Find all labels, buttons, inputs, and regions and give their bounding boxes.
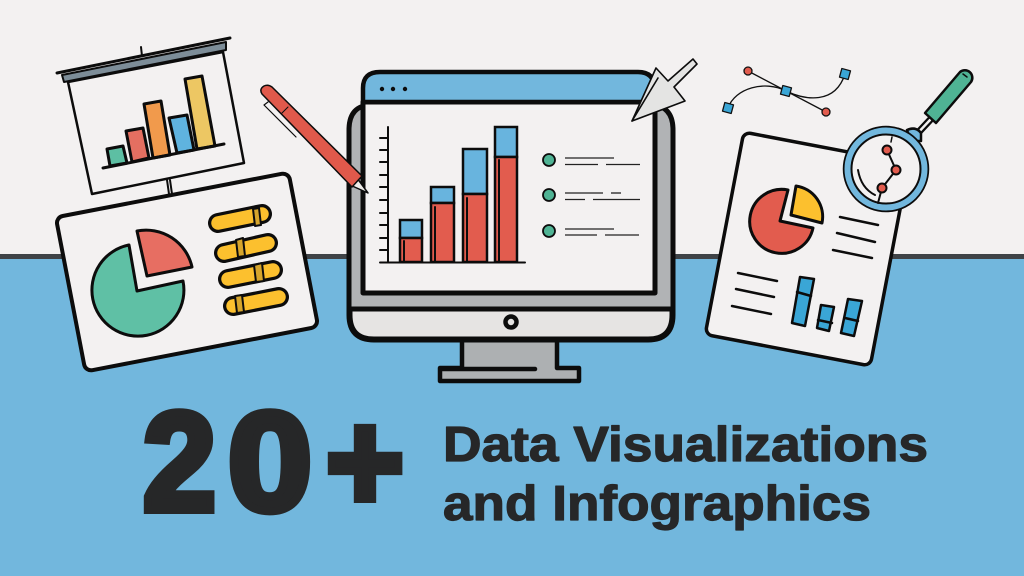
board legend pills <box>218 208 279 313</box>
heading: Data Visualizations and Infographics: Data Visualizations <box>443 418 928 472</box>
monitor screen <box>363 102 655 293</box>
heading: Data Visualizations and Infographics <box>443 418 928 531</box>
magnifier lens <box>844 127 928 211</box>
projector screen with bar chart <box>57 38 244 194</box>
document bar chart <box>792 277 862 336</box>
monitor body <box>349 105 673 340</box>
monitor stand <box>440 340 579 381</box>
lens inner outline <box>852 134 920 204</box>
big number: 20+: 2 <box>143 383 216 540</box>
pen <box>261 85 368 193</box>
document text lines <box>732 217 878 314</box>
big number: 20+: 0 <box>228 383 312 540</box>
big number: 20+ <box>143 383 404 540</box>
monitor camera <box>506 316 516 328</box>
report document <box>705 132 909 366</box>
browser title bar <box>363 72 655 102</box>
lens ring <box>848 131 924 207</box>
document pie chart <box>750 186 823 253</box>
projector bar chart <box>103 76 224 168</box>
monitor <box>349 72 673 381</box>
bezier curve tool <box>722 67 851 116</box>
heading: Data Visualizations and Infographics: and Infographics <box>443 477 871 531</box>
magnifying glass <box>844 70 972 211</box>
board pie chart <box>92 230 192 336</box>
stacked bar chart <box>380 127 525 262</box>
board with pie chart and legend pills <box>56 173 318 371</box>
lens contents <box>858 137 900 203</box>
arrow cursor <box>632 59 697 121</box>
magnifier handle <box>907 70 972 141</box>
big number: 20+: + <box>326 383 404 540</box>
chart legend <box>543 154 640 237</box>
